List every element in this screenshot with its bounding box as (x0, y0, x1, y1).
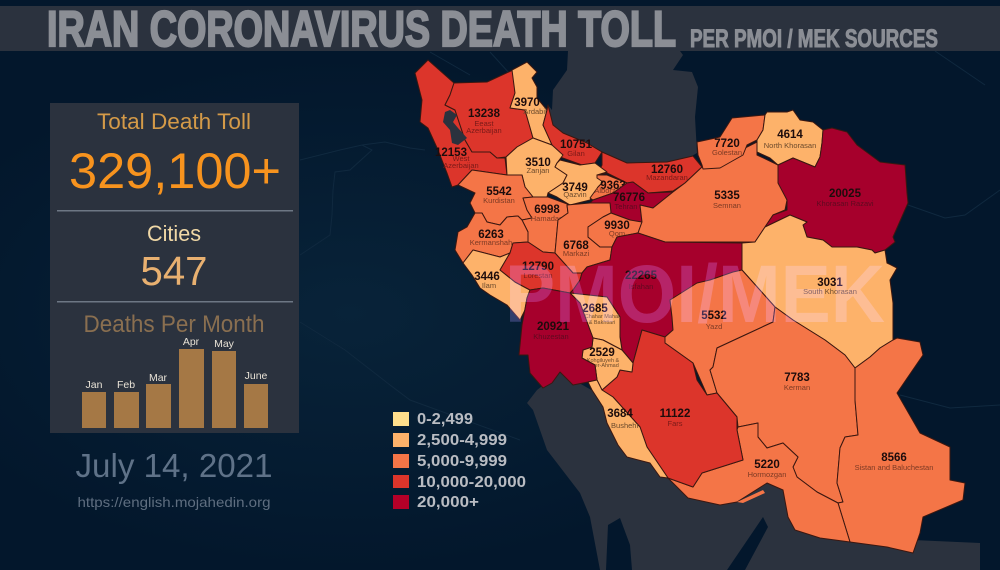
date: July 14, 2021 (76, 447, 272, 484)
Fars: Fars (668, 419, 683, 428)
Markazi: 6768 (563, 240, 589, 252)
Chahar Mahal and Bakhtiari (570, 293, 622, 350)
Lorestan: Lorestan (523, 271, 553, 280)
Markazi: Markazi (563, 249, 589, 258)
Qom: 9930 (604, 220, 630, 232)
Fars (602, 330, 743, 487)
West Azerbaijan (415, 60, 507, 187)
Khorasan Razavi: 20025 (829, 188, 862, 200)
bar chart: deaths per month: Jan (86, 379, 103, 391)
Ilam (463, 250, 530, 320)
cities label: Cities (147, 221, 201, 246)
Lorestan: 12790 (522, 261, 554, 273)
Isfahan: Isfahan (629, 282, 653, 291)
Chahar Mahal and Bakhtiari: 2685 (582, 303, 608, 315)
Alborz: Alborz (594, 186, 616, 195)
Sistan and Baluchestan: 8566 (881, 452, 907, 464)
Lorestan (500, 242, 582, 293)
Alborz (590, 175, 627, 200)
Qazvin: 3749 (562, 182, 588, 194)
Khorasan Razavi (765, 128, 908, 253)
legend: 20,000+ (417, 494, 479, 511)
Markazi (555, 203, 612, 273)
West Azerbaijan: Azerbaijan (443, 161, 479, 170)
Gilan: 10751 (560, 139, 593, 151)
Mazandaran: 12760 (651, 164, 683, 176)
cities number: 547 (140, 248, 208, 294)
Fars: 11122 (660, 408, 690, 420)
Semnan: Semnan (713, 201, 741, 210)
Chahar Mahal and Bakhtiari: & Bakhtiari (589, 320, 615, 326)
Ardabil: Ardabil (523, 107, 547, 116)
legend: 0-2,499 (417, 411, 473, 428)
Bushehr: 3684 (607, 408, 633, 420)
Hormozgan (668, 423, 850, 542)
East Azerbaijan: Eeast (474, 119, 495, 128)
bar chart: deaths per month: Mar (149, 372, 168, 384)
North Khorasan: 4614 (777, 129, 803, 141)
Khuzestan: 20921 (537, 321, 570, 333)
Qazvin (548, 160, 607, 205)
legend: 2,500-4,999 (417, 432, 507, 449)
East Azerbaijan (445, 70, 533, 158)
map of Iran provinces (415, 60, 965, 553)
watermark: PMOI/MEK (505, 249, 885, 340)
East Azerbaijan: 13238 (468, 108, 501, 120)
West Azerbaijan: West (453, 154, 470, 163)
Kohgiluyeh and Boyer-Ahmad (582, 338, 633, 390)
Tehran (590, 182, 673, 223)
South Khorasan: 3031 (817, 277, 843, 289)
bar chart: deaths per month: Feb (117, 379, 135, 391)
Bushehr (588, 380, 668, 478)
panel: summary stats (50, 103, 299, 433)
Kurdistan (458, 170, 533, 225)
Mazandaran (597, 152, 702, 193)
Chahar Mahal and Bakhtiari: Chahar Mahal (585, 314, 619, 320)
Kurdistan: 5542 (486, 186, 512, 198)
bar chart: deaths per month (82, 336, 268, 428)
Tehran: Tehran (615, 202, 637, 211)
deaths per month heading: Deaths Per Month (84, 311, 264, 338)
source url: https://english.mojahedin.org (78, 494, 270, 510)
North Khorasan (757, 110, 823, 167)
South Khorasan (742, 215, 897, 368)
Hormozgan: 5220 (754, 459, 780, 471)
legend (393, 411, 526, 511)
Kohgiluyeh and Boyer-Ahmad: Kohgiluyeh & (587, 358, 620, 364)
Isfahan (570, 233, 742, 363)
Hamadan: 6998 (534, 204, 560, 216)
Yazd: Yazd (706, 322, 722, 331)
Qeshm island (737, 490, 765, 503)
Golestan: Golestan (712, 148, 742, 157)
Qom: Qom (609, 229, 625, 238)
Qazvin: Qazvin (563, 190, 587, 199)
bar chart: deaths per month: June (245, 370, 268, 382)
West Azerbaijan: 12153 (435, 147, 467, 159)
Kermanshah: 6263 (478, 229, 504, 241)
Ardabil: 3970 (514, 97, 540, 109)
header bar (0, 6, 1000, 51)
legend: 10,000-20,000 (417, 474, 526, 491)
Tehran: 76776 (613, 192, 645, 204)
Kermanshah: Kermanshah (470, 238, 512, 247)
total death toll number: 329,100+ (69, 143, 281, 199)
South Khorasan: South Khorasan (803, 287, 857, 296)
Kohgiluyeh and Boyer-Ahmad: 2529 (589, 347, 615, 359)
Zanjan: Zanjan (527, 166, 549, 175)
Golestan: 7720 (714, 138, 740, 150)
Alborz: 9363 (600, 180, 626, 192)
Gilan: Gilan (567, 149, 585, 158)
Qom (588, 213, 642, 247)
Zanjan (506, 138, 567, 197)
North Khorasan: North Khorasan (764, 141, 816, 150)
Yazd (665, 270, 775, 395)
Kohgiluyeh and Boyer-Ahmad: Boyer-Ahmad (585, 363, 619, 369)
Bushehr: Bushehr (611, 421, 639, 430)
Sistan and Baluchestan (837, 338, 965, 553)
Kerman (710, 307, 858, 503)
Khorasan Razavi: Khorasan Razavi (816, 199, 874, 208)
Lake Urmia (443, 110, 467, 145)
Isfahan: 22265 (625, 270, 658, 282)
total death toll label: Total Death Toll (97, 109, 251, 134)
Caspian Sea (548, 51, 698, 163)
Semnan: 5335 (714, 190, 740, 202)
Kerman: 7783 (784, 372, 810, 384)
title: IRAN CORONAVIRUS DEATH TOLL (47, 1, 676, 57)
Kermanshah (455, 213, 528, 263)
Kurdistan: Kurdistan (483, 196, 515, 205)
bar chart: deaths per month: Apr (183, 336, 200, 348)
Hamadan (522, 197, 570, 253)
Khuzestan (519, 288, 597, 388)
Golestan (697, 115, 765, 169)
East Azerbaijan: Azerbaijan (466, 126, 502, 135)
Sistan and Baluchestan: Sistan and Baluchestan (855, 463, 933, 472)
Persian Gulf and Gulf of Oman (527, 372, 980, 570)
Hormozgan: Hormozgan (748, 470, 786, 479)
Hamadan: Hamadan (531, 214, 563, 223)
legend: 5,000-9,999 (417, 453, 507, 470)
Semnan (638, 142, 787, 242)
Zanjan: 3510 (525, 157, 551, 169)
Gilan (543, 105, 602, 165)
Ilam: 3446 (474, 271, 500, 283)
Ilam: Ilam (482, 281, 496, 290)
Khuzestan: Khuzestan (533, 332, 569, 341)
Ardabil (510, 62, 552, 145)
Kerman: Kerman (784, 383, 810, 392)
Yazd: 5532 (701, 310, 727, 322)
Mazandaran: Mazandaran (646, 173, 688, 182)
bar chart: deaths per month: May (214, 338, 235, 350)
